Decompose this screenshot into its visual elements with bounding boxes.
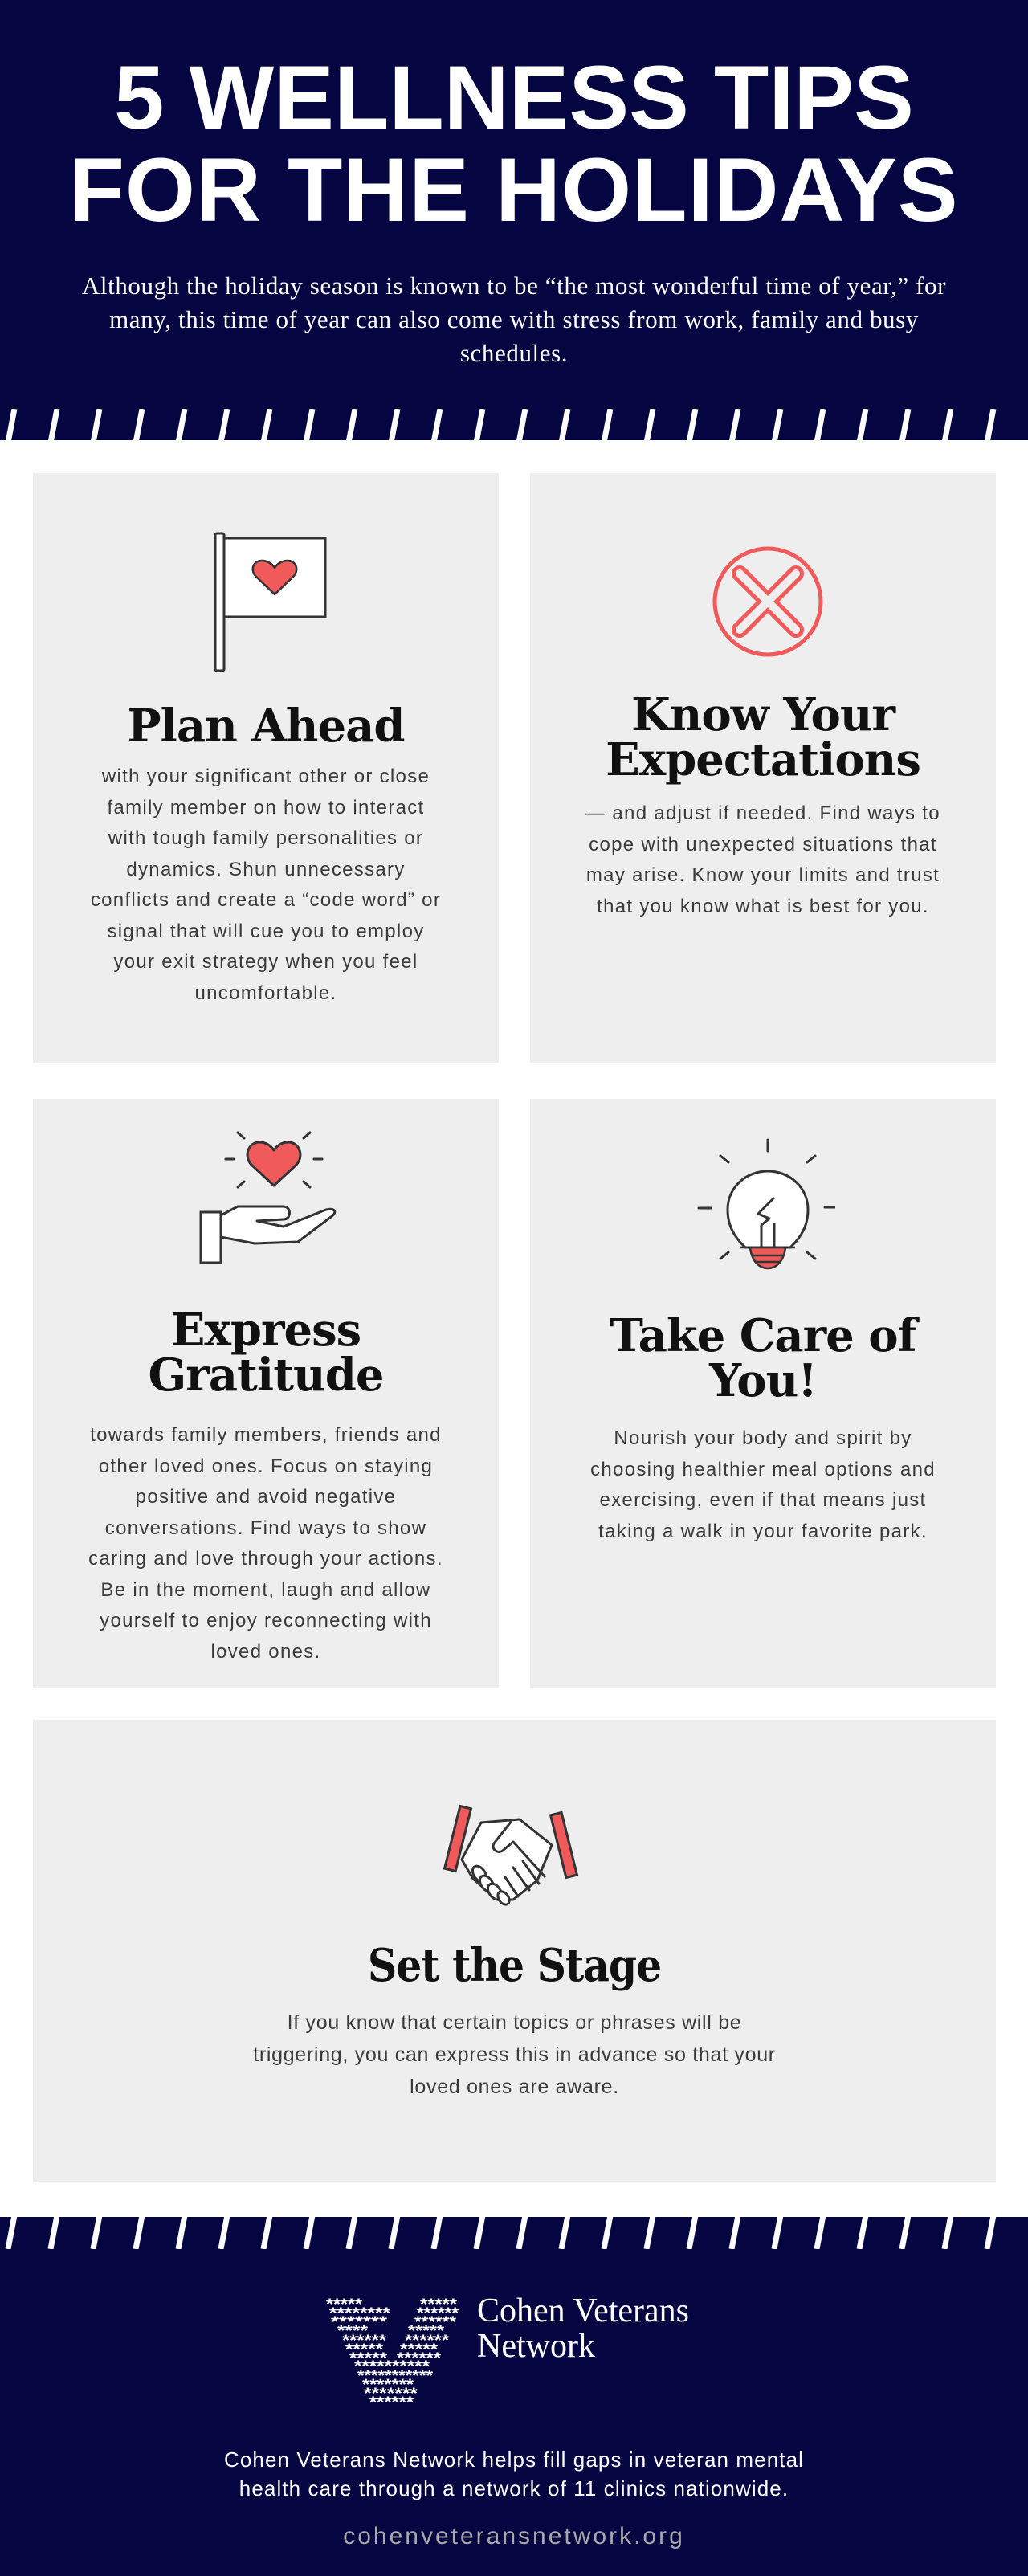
body text: towards family members, friends and (90, 1424, 442, 1446)
title: 5 WELLNESS TIPS (114, 47, 914, 148)
body text: — and adjust if needed. Find ways to (585, 802, 940, 824)
header background (0, 0, 1028, 443)
icon: star V: ****** (397, 2350, 442, 2367)
heading: You! (709, 1354, 817, 1407)
footer description (224, 2447, 804, 2500)
body text: your exit strategy when you feel (113, 951, 418, 973)
body text: signal that will cue you to employ (107, 921, 425, 941)
icon: star V: ****** (342, 2333, 387, 2349)
logo text: Network (477, 2328, 595, 2365)
icon: star V: ****** (417, 2305, 459, 2322)
body text: loved ones are aware. (410, 2076, 619, 2098)
icon: handshake (443, 1804, 578, 1906)
icon: star V: ******* (362, 2377, 414, 2394)
icon: star V: ***** (408, 2323, 445, 2340)
body text (88, 1424, 443, 1663)
heading (610, 1309, 920, 1407)
icon: star V: ***** (400, 2341, 439, 2358)
header stripes (0, 409, 1028, 443)
body text (590, 1427, 936, 1542)
footer background (0, 2215, 1028, 2576)
body text: positive and avoid negative (136, 1486, 396, 1508)
logo text (477, 2292, 689, 2365)
icon: hand holding heart (199, 1131, 336, 1264)
icon: star V: ***** (345, 2341, 384, 2358)
body text: If you know that certain topics or phrases will be (288, 2011, 741, 2034)
footer description: health care through a network of 11 clinics nationwide. (239, 2476, 789, 2500)
body text: taking a walk in your favorite park. (598, 1520, 928, 1542)
body text: triggering, you can express this in advance so that your (253, 2043, 776, 2066)
heading (606, 688, 920, 786)
icon: flag with heart (214, 532, 326, 672)
body text: yourself to enjoy reconnecting with (100, 1610, 432, 1631)
body text: choosing healthier meal options and (590, 1459, 936, 1480)
body text: other loved ones. Focus on staying (99, 1455, 433, 1476)
title (69, 47, 959, 240)
title: FOR THE HOLIDAYS (69, 140, 959, 240)
icon: star V: **** (337, 2323, 369, 2340)
body text: dynamics. Shun unnecessary (126, 858, 406, 880)
logo: cohen veterans network (326, 2292, 689, 2410)
heading: Gratitude (148, 1349, 384, 1402)
body text: uncomfortable. (195, 982, 337, 1004)
heading: Set the Stage (368, 1939, 661, 1992)
body text: conversations. Find ways to show (105, 1517, 426, 1539)
panel: take care of you (530, 1099, 996, 1688)
icon: star V: ***** (420, 2296, 458, 2313)
heading: Plan Ahead (127, 700, 405, 753)
icon: star V: ******** (329, 2305, 391, 2322)
icon: star V: ******* (364, 2386, 418, 2402)
intro text: Although the holiday season is known to be “the most wonderful time of year,” for (82, 271, 946, 300)
footer stripes (0, 2215, 1028, 2249)
heading: Know Your (631, 688, 895, 741)
body text: that you know what is best for you. (597, 895, 929, 917)
icon: star V: ********** (354, 2358, 430, 2375)
panel: set the stage (33, 1720, 996, 2182)
logo text: Cohen Veterans (477, 2292, 689, 2329)
icon: x circle (713, 546, 822, 657)
icon: star V: ***** (326, 2296, 363, 2313)
body text: Nourish your body and spirit by (614, 1427, 912, 1449)
body text: with your significant other or close (102, 765, 430, 787)
icon: star V (326, 2296, 459, 2410)
body text: family member on how to interact (107, 797, 425, 818)
body text (91, 765, 441, 1004)
body text: caring and love through your actions. (88, 1548, 443, 1570)
heading: Expectations (606, 733, 920, 786)
panel: plan ahead (33, 473, 499, 1063)
heading (148, 1304, 384, 1402)
body text: Be in the moment, laugh and allow (100, 1579, 431, 1600)
body text: may arise. Know your limits and trust (586, 864, 940, 886)
body text: cope with unexpected situations that (589, 834, 937, 855)
heading: Express (171, 1304, 361, 1357)
icon: light bulb (697, 1139, 835, 1269)
body text: with tough family personalities or (108, 827, 423, 849)
panel: express gratitude (33, 1099, 499, 1688)
icon: star V: ****** (405, 2333, 450, 2349)
intro text: many, this time of year can also come with stress from work, family and busy (109, 305, 919, 333)
intro text (82, 271, 946, 367)
body text (253, 2011, 776, 2098)
body text: conflicts and create a “code word” or (91, 889, 441, 911)
footer description: Cohen Veterans Network helps fill gaps in veteran mental (224, 2447, 804, 2472)
icon: star V: ****** (414, 2314, 457, 2331)
body text: loved ones. (210, 1640, 321, 1663)
body text (585, 802, 940, 917)
website url: cohenveteransnetwork.org (343, 2523, 685, 2549)
intro text: schedules. (460, 339, 568, 367)
icon: star V: ***** (349, 2350, 388, 2367)
icon: star V: ******* (331, 2314, 388, 2331)
body text: exercising, even if that means just (599, 1489, 927, 1511)
panel: know your expectations (530, 473, 996, 1063)
icon: star V: *********** (357, 2368, 434, 2385)
heading: Take Care of (610, 1309, 916, 1362)
